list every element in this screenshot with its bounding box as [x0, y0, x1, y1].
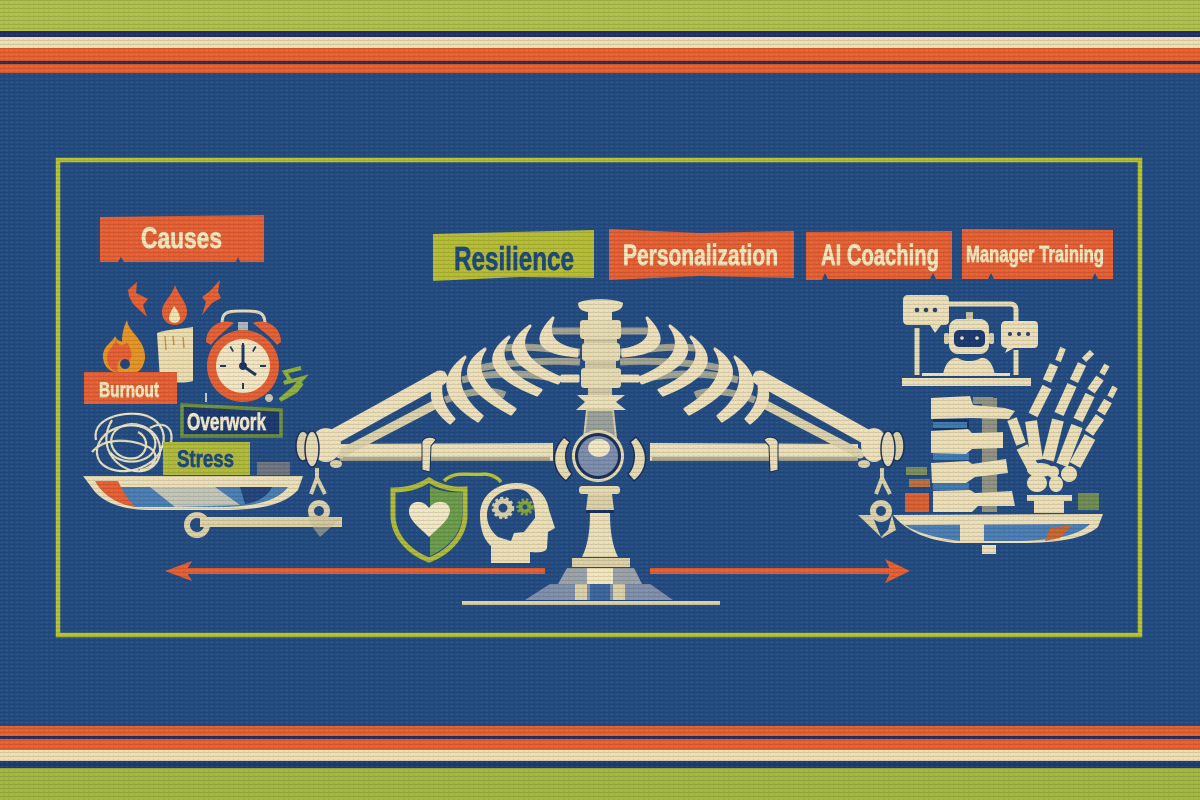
icon: AI coach monitor [902, 295, 1038, 386]
label: Manager Training: Manager Training [966, 241, 1104, 267]
gray book block [257, 462, 290, 475]
label: Overwork: Overwork [187, 409, 266, 436]
beam [340, 437, 858, 472]
label: Personalization [609, 229, 794, 280]
icon: tangled scribble [92, 414, 172, 471]
left hanger clasp [308, 468, 342, 537]
icon: hand skeleton [1012, 348, 1115, 513]
label: Burnout [84, 372, 177, 404]
back ribs [445, 331, 755, 400]
robot coach [943, 312, 995, 375]
bottom stripe band [0, 726, 1200, 800]
left pan dish [83, 476, 303, 510]
right ribs [622, 318, 768, 423]
label: Burnout: Burnout [99, 379, 159, 402]
connector arc [444, 474, 501, 482]
lower column [462, 486, 720, 605]
icon: bolt right [202, 280, 221, 315]
icon: bolt left [128, 282, 148, 317]
spine vertebrae [576, 299, 626, 410]
arm bones left [296, 378, 440, 468]
heading: Causes: Causes [141, 222, 222, 255]
label: Resilience [433, 230, 594, 281]
central skeleton scale [296, 299, 904, 605]
label: Stress: Stress [177, 446, 234, 473]
neck [584, 410, 616, 438]
panel: green frame [58, 160, 1140, 635]
arrow: toward resilience factors [650, 559, 910, 583]
left pan support bar [187, 515, 342, 535]
icon: burnout fire [103, 320, 145, 372]
heading: Causes [100, 215, 264, 262]
label: AI Coaching: AI Coaching [821, 239, 939, 272]
icon: shield with heart [393, 480, 465, 560]
icon: alarm clock [205, 311, 281, 402]
icon: head with gears [480, 483, 555, 563]
icon: green squiggle bolt [280, 368, 303, 400]
central pivot sphere [554, 430, 646, 482]
right pan with skeleton and AI coach [893, 295, 1115, 554]
speech bubble one [903, 295, 949, 333]
speech bubble two [1001, 321, 1038, 353]
label: Resilience: Resilience [454, 240, 574, 277]
right hanger clasp [858, 468, 896, 538]
right pan dish [893, 514, 1103, 554]
left scale pan with causes [83, 280, 342, 535]
arrow: toward causes [165, 561, 545, 581]
label: AI Coaching [806, 231, 952, 280]
vertebra column [931, 396, 1015, 512]
right pan blocks [905, 467, 1099, 512]
left ribs [432, 318, 578, 423]
icon: candle [157, 285, 193, 383]
arm bones right [760, 378, 904, 468]
top stripe band [0, 0, 1200, 73]
label: Stress [163, 442, 250, 475]
label: Personalization: Personalization [623, 239, 778, 272]
label: Manager Training [962, 229, 1113, 279]
